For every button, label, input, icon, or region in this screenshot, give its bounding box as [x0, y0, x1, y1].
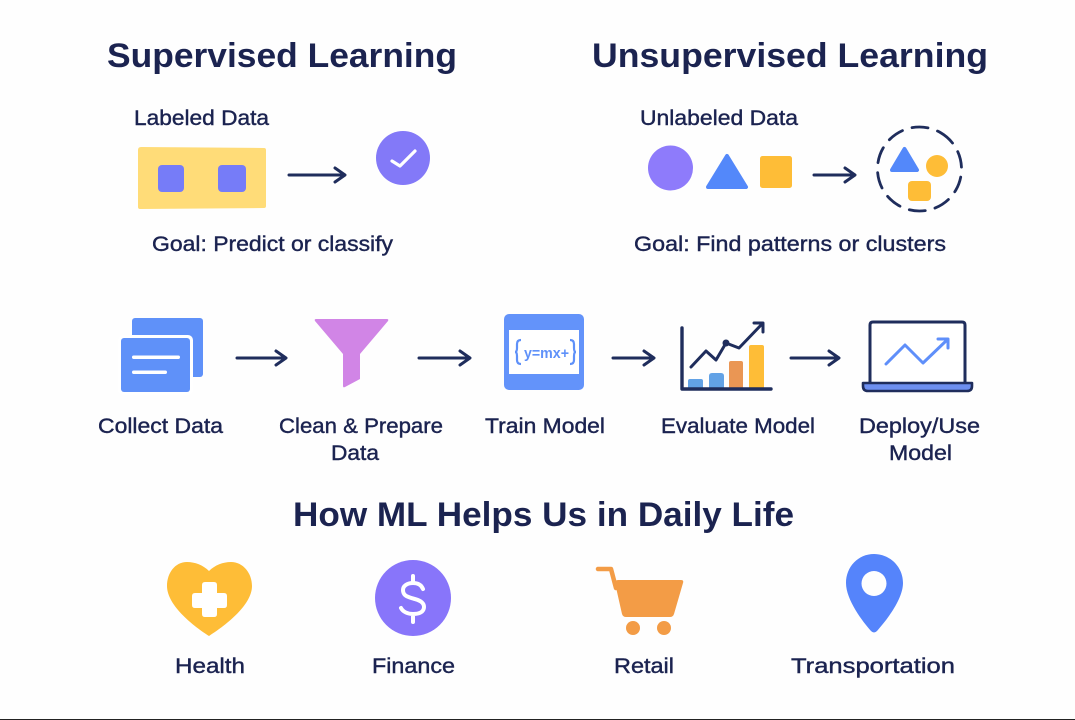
label: deploy or use model: Model [889, 442, 952, 465]
label: clean and prepare data [279, 415, 443, 465]
use: finance [372, 560, 455, 678]
arrow: clean to train [419, 351, 470, 365]
label: clean and prepare data: Data [331, 442, 379, 465]
label: health: Health [175, 655, 245, 678]
text: supervised goal: Goal: Predict or classify [152, 233, 394, 256]
label: deploy or use model: Deploy/Use [859, 415, 980, 438]
panel: unsupervised learning [592, 37, 988, 256]
heading: unsupervised learning: Unsupervised Learning [592, 37, 988, 75]
panel: daily life uses [167, 554, 955, 678]
heading: supervised learning: Supervised Learning [107, 37, 457, 75]
icon: labeled data card [138, 147, 266, 209]
panel: workflow steps [98, 314, 980, 465]
icon: model formula: y=mx+ [524, 345, 569, 362]
icon: heart with cross [167, 562, 252, 636]
icon: laptop [863, 322, 972, 391]
chart: evaluation bars and trend [682, 323, 771, 390]
heading: how ML helps: How ML Helps Us in Daily Life [293, 496, 794, 534]
step: train model [485, 314, 605, 438]
label: transportation: Transportation [791, 655, 955, 678]
arrow: evaluate to deploy [791, 351, 839, 365]
arrow: train to evaluate [613, 351, 654, 365]
label: clean and prepare data: Clean & Prepare [279, 415, 443, 438]
use: health [167, 562, 252, 678]
step: deploy model [859, 322, 980, 465]
use: transportation [791, 554, 955, 678]
label: unlabeled data: Unlabeled Data [640, 107, 798, 130]
icon: funnel [315, 319, 388, 387]
icon: unlabeled shapes [648, 146, 792, 190]
arrow: data to clusters [814, 168, 855, 182]
icon: dashed cluster [862, 112, 977, 226]
arrow: data to prediction [289, 168, 345, 182]
step: collect data [98, 318, 223, 438]
icon: map pin [846, 554, 903, 632]
use: retail [598, 569, 683, 678]
icon: check result [376, 131, 430, 185]
icon: shopping cart [598, 569, 683, 635]
icon: dollar coin [375, 560, 451, 636]
label: evaluate model: Evaluate Model [661, 415, 815, 438]
label: collect data: Collect Data [98, 415, 223, 438]
step: clean and prepare [279, 319, 443, 465]
text: unsupervised goal: Goal: Find patterns or clusters [634, 233, 946, 256]
label: train model: Train Model [485, 415, 605, 438]
label: retail: Retail [614, 655, 674, 678]
label: deploy or use model [859, 415, 980, 465]
step: evaluate model [661, 323, 815, 438]
panel: supervised learning [107, 37, 457, 256]
arrow: collect to clean [237, 351, 286, 365]
label: finance: Finance [372, 655, 455, 678]
icon: documents [118, 318, 203, 395]
label: labeled data: Labeled Data [134, 107, 269, 130]
